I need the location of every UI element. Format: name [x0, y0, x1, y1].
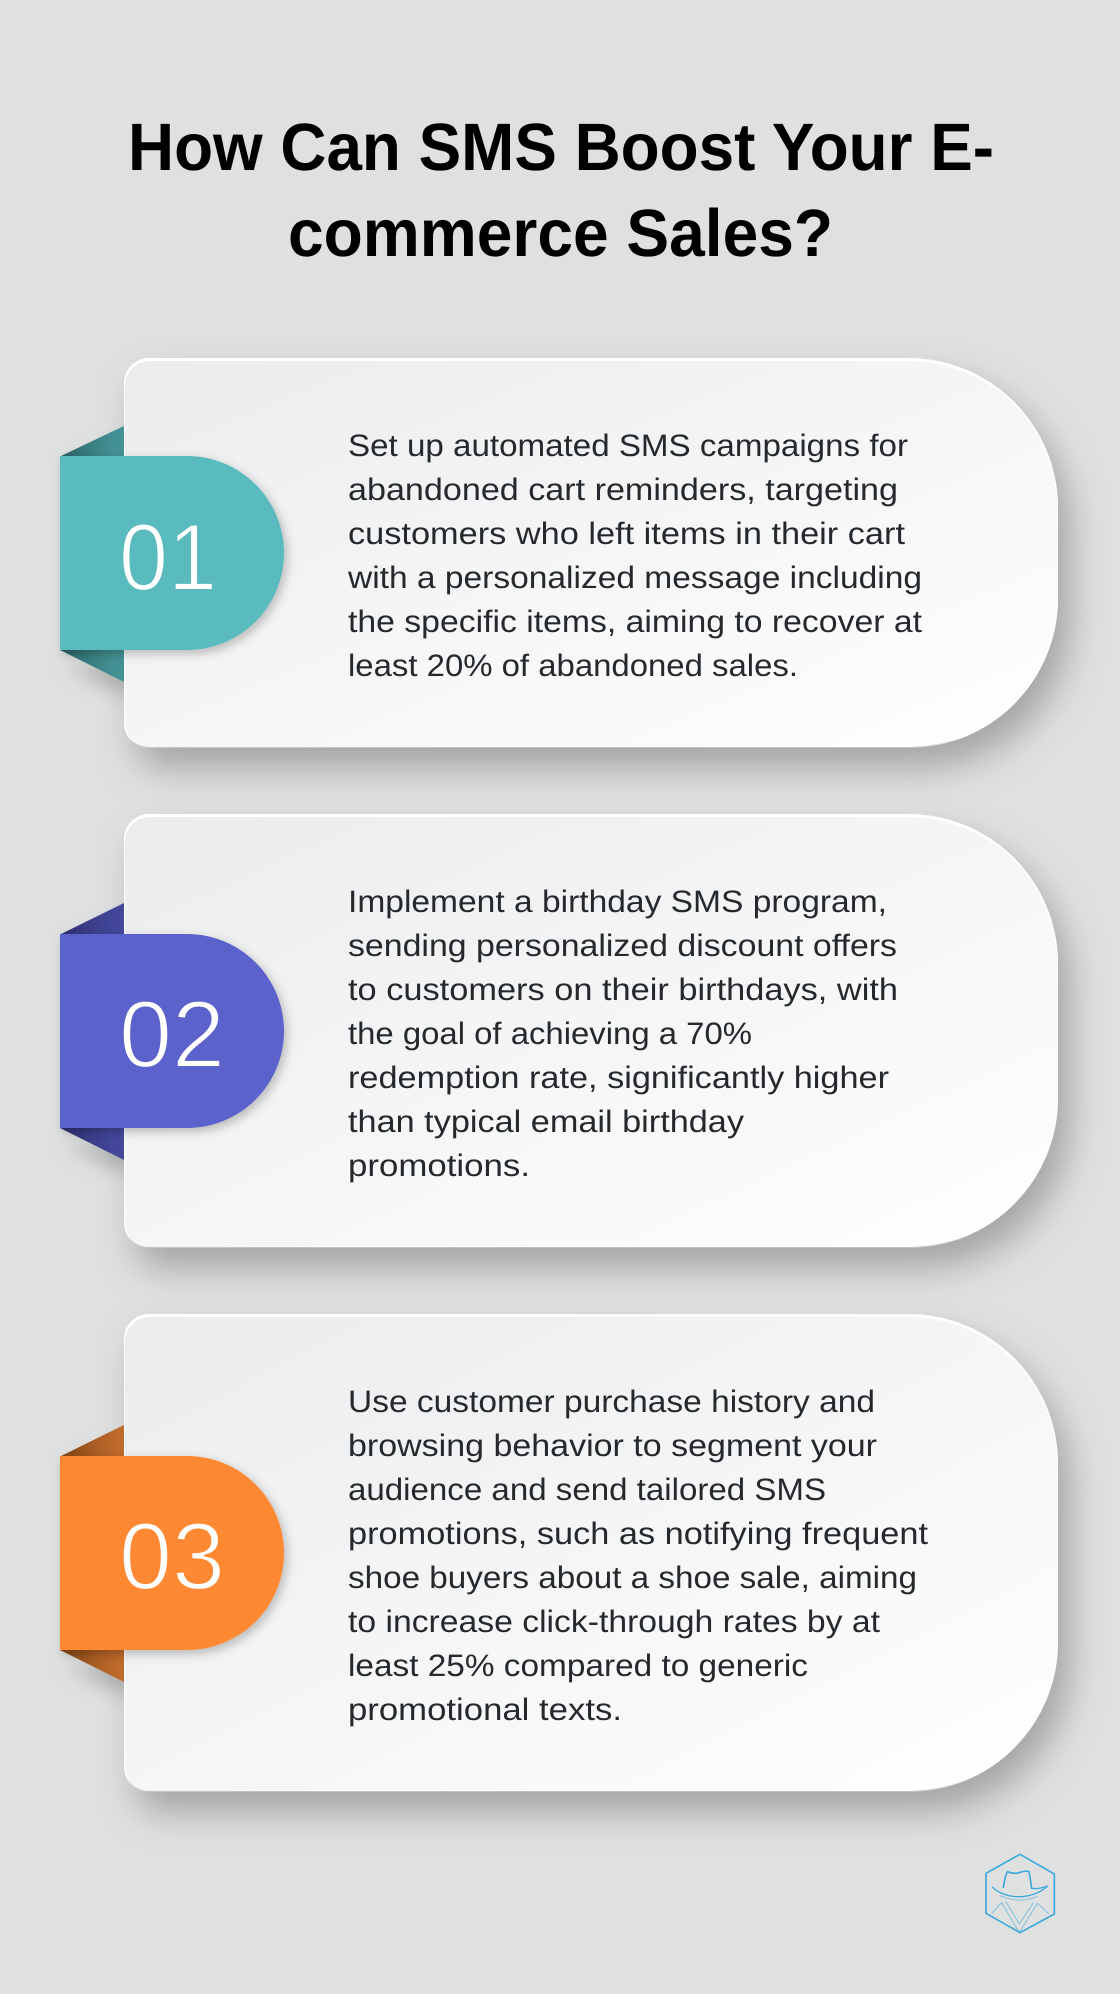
text: step 01: least 20% of abandoned sales.	[348, 648, 798, 683]
title: How Can SMS Boost Your E-	[128, 110, 994, 185]
text: step 02: promotions.	[348, 1148, 530, 1183]
badge: 03: 03	[119, 1504, 225, 1610]
text: step 03: promotions, such as notifying frequent	[348, 1516, 928, 1551]
text: step 02: to customers on their birthdays, with	[348, 972, 898, 1007]
text: step 03: Use customer purchase history and	[348, 1384, 875, 1419]
icon: spy logo hexagon	[986, 1854, 1054, 1933]
text: step 03: promotional texts.	[348, 1692, 622, 1727]
text: step 02	[348, 884, 898, 1183]
ribbon folds: step 02	[60, 902, 126, 1161]
text: step 03: to increase click-through rates by at	[348, 1604, 880, 1639]
text: step 03: shoe buyers about a shoe sale, aiming	[348, 1560, 917, 1595]
card: step 02	[124, 814, 1058, 1248]
text: step 01: abandoned cart reminders, targeting	[348, 472, 898, 507]
text: step 03: audience and send tailored SMS	[348, 1472, 826, 1507]
badge: 02	[60, 934, 284, 1128]
text: step 01: with a personalized message including	[347, 560, 922, 595]
ribbon folds: step 03	[60, 1424, 126, 1683]
text: step 01: the specific items, aiming to recover at	[348, 604, 922, 639]
card: step 03	[124, 1314, 1058, 1792]
text: step 02: Implement a birthday SMS program,	[348, 884, 887, 919]
panel: step 02	[60, 814, 1058, 1248]
text: step 02: sending personalized discount offers	[348, 928, 897, 963]
badge: 03	[60, 1456, 284, 1650]
title	[128, 110, 994, 271]
text: step 01: customers who left items in their cart	[348, 516, 905, 551]
text: step 03	[348, 1384, 928, 1727]
text: step 03: least 25% compared to generic	[348, 1648, 808, 1683]
text: step 02: the goal of achieving a 70%	[348, 1016, 752, 1051]
text: step 01	[347, 428, 922, 683]
badge: 01: 01	[119, 505, 217, 611]
text: step 02: redemption rate, significantly higher	[348, 1060, 889, 1095]
text: step 03: browsing behavior to segment your	[348, 1428, 877, 1463]
title: commerce Sales?	[288, 196, 833, 271]
text: step 02: than typical email birthday	[348, 1104, 745, 1139]
text: step 01: Set up automated SMS campaigns for	[348, 428, 908, 463]
ribbon folds: step 01	[60, 425, 126, 683]
card: step 01	[124, 358, 1058, 748]
panel: step 01	[60, 358, 1058, 748]
panel: step 03	[60, 1314, 1058, 1792]
badge: 02: 02	[119, 982, 225, 1088]
badge: 01	[60, 456, 284, 650]
